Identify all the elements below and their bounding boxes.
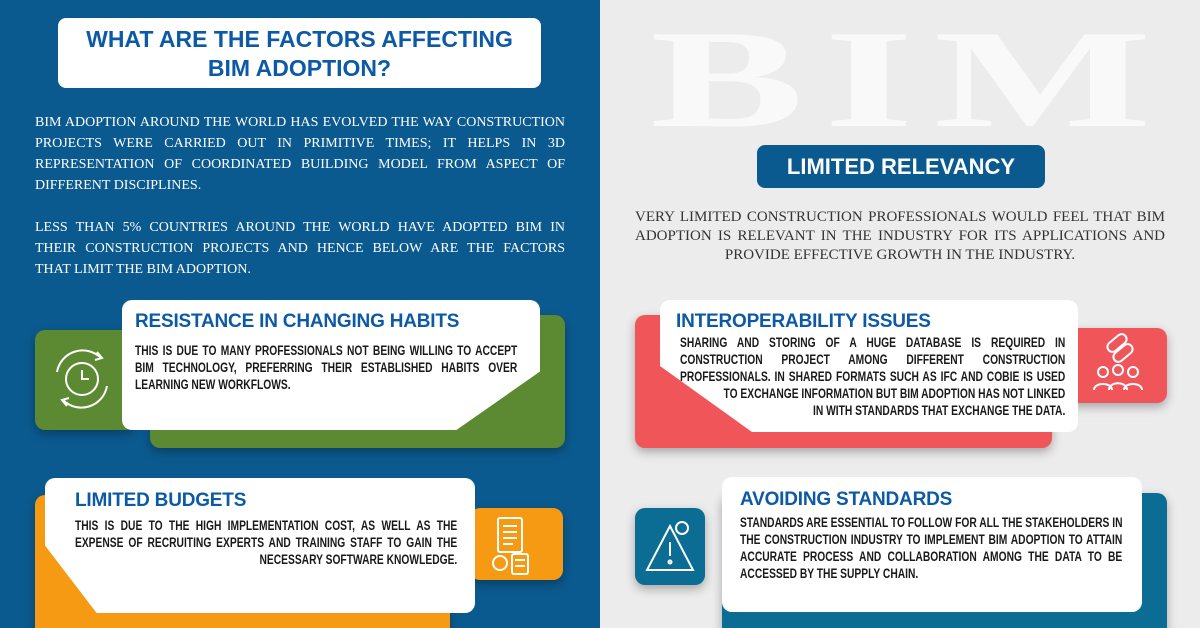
white card: [722, 477, 1142, 612]
body text: CONSTRUCTION PROJECT AMONG DIFFERENT CONSTRUCTION: [680, 352, 1065, 367]
intro text: REPRESENTATION OF COORDINATED BUILDING MODEL FROM ASPECT OF: [35, 157, 565, 172]
body text: [75, 518, 457, 567]
intro text: PROJECTS WERE CARRIED OUT IN PRIMITIVE TIMES; IT HELPS IN 3D: [35, 136, 565, 151]
heading: AVOIDING STANDARDS: [740, 489, 952, 510]
intro text: THAT LIMIT THE BIM ADOPTION.: [35, 262, 251, 277]
body text: [740, 515, 1122, 581]
title box: [58, 18, 541, 88]
intro text: BIM ADOPTION AROUND THE WORLD HAS EVOLVED THE WAY CONSTRUCTION: [35, 115, 565, 130]
left background: [0, 0, 600, 628]
body text: EXPENSE OF RECRUITING EXPERTS AND TRAINING STAFF TO GAIN THE: [75, 535, 457, 550]
title box: BIM ADOPTION?: [208, 55, 391, 81]
heading: INTEROPERABILITY ISSUES: [676, 311, 931, 332]
body text: STANDARDS ARE ESSENTIAL TO FOLLOW FOR ALL THE STAKEHOLDERS IN: [740, 515, 1122, 530]
white card: [45, 478, 475, 613]
icon: warning: [635, 508, 705, 585]
icon: broken link people: [1068, 328, 1167, 403]
panel: avoiding standards: [629, 477, 1173, 628]
body text: ACCESSED BY THE SUPPLY CHAIN.: [740, 566, 918, 581]
title box: WHAT ARE THE FACTORS AFFECTING: [86, 26, 513, 52]
intro text: DIFFERENT DISCIPLINES.: [35, 178, 201, 193]
white card: [660, 300, 1078, 432]
body text: THIS IS DUE TO THE HIGH IMPLEMENTATION COST, AS WELL AS THE: [75, 518, 457, 533]
body text: PROFESSIONALS. IN SHARED FORMATS SUCH AS IFC AND COBIE IS USED: [680, 369, 1065, 384]
body text: IN WITH STANDARDS THAT EXCHANGE THE DATA.: [813, 403, 1065, 418]
body text: LEARNING NEW WORKFLOWS.: [135, 377, 291, 392]
body text: THIS IS DUE TO MANY PROFESSIONALS NOT BEING WILLING TO ACCEPT: [135, 343, 517, 358]
right background: [600, 0, 1200, 628]
heading: LIMITED BUDGETS: [75, 490, 246, 511]
body text: TO EXCHANGE INFORMATION BUT BIM ADOPTION HAS NOT LINKED: [724, 386, 1065, 401]
intro text: THEIR CONSTRUCTION PROJECTS AND HENCE BELOW ARE THE FACTORS: [35, 241, 565, 256]
body text: SHARING AND STORING OF A HUGE DATABASE IS REQUIRED IN: [680, 335, 1065, 350]
icon: clock cycle: [35, 330, 135, 430]
relevancy text: VERY LIMITED CONSTRUCTION PROFESSIONALS WOULD FEEL THAT BIM ADOPTION IS RELEVANT IN THE INDUSTRY FOR ITS APPLICATIONS AND PROVIDE EFFECTIVE GROWTH IN THE INDUSTRY.: [635, 209, 1165, 263]
body text: BIM TECHNOLOGY, PREFERRING THEIR ESTABLISHED HABITS OVER: [135, 360, 517, 375]
BIM watermark: BIM: [650, 2, 1171, 157]
white card: [122, 300, 540, 430]
body text: [135, 343, 518, 392]
heading: RESISTANCE IN CHANGING HABITS: [135, 311, 459, 332]
intro text: LESS THAN 5% COUNTRIES AROUND THE WORLD HAVE ADOPTED BIM IN: [35, 220, 565, 235]
panel: resistance in changing habits: [30, 300, 570, 456]
body text: [680, 335, 1065, 418]
heading: limited relevancy: [757, 145, 1045, 188]
panel: interoperability issues: [629, 300, 1173, 458]
body text: THE CONSTRUCTION INDUSTRY TO IMPLEMENT BIM ADOPTION TO ATTAIN: [740, 532, 1122, 547]
heading: limited relevancy: LIMITED RELEVANCY: [787, 154, 1015, 179]
panel: limited budgets: [30, 478, 568, 628]
body text: ACCURATE PROCESS AND COLLABORATION AMONG THE DATA TO BE: [740, 549, 1122, 564]
body text: NECESSARY SOFTWARE KNOWLEDGE.: [259, 552, 457, 567]
intro text: [35, 115, 565, 277]
icon: budget: [470, 508, 563, 580]
